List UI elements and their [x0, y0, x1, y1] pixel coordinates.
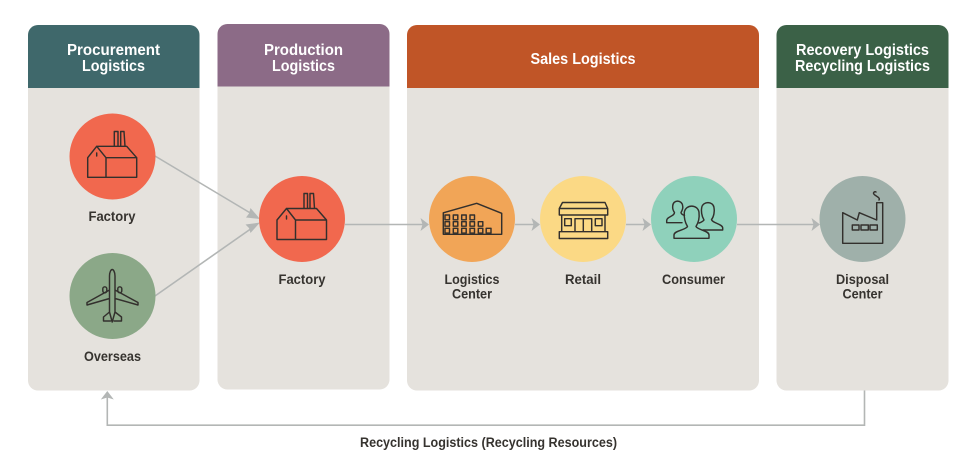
label: logistics center: Center: [452, 286, 493, 302]
heading: production logistics: Logistics: [272, 58, 335, 75]
heading: recovery and recycling logistics: Recycling Logistics: [795, 58, 930, 75]
icon: production factory: [259, 176, 345, 262]
label: logistics center: Logistics: [444, 272, 500, 287]
icon: retail store: [540, 176, 626, 262]
label: disposal center: Disposal: [836, 272, 889, 287]
arrow: overseas to production factory: [155, 222, 260, 296]
label: retail: Retail: [565, 272, 601, 287]
heading: production logistics: Production: [264, 42, 343, 59]
arrow: factory to logistics center: [345, 218, 429, 231]
arrow: consumer to disposal center: [737, 218, 820, 231]
label: recycling logistics loop: Recycling Logistics (Recycling Resources): [360, 435, 617, 450]
panel: procurement logistics: [28, 25, 200, 390]
label: consumer: Consumer: [662, 272, 726, 287]
arrow: logistics center to retail: [515, 218, 540, 231]
icon: procurement factory: [70, 114, 156, 200]
label: disposal center: Center: [842, 286, 883, 302]
heading: procurement logistics: Procurement: [67, 42, 160, 59]
heading: recovery and recycling logistics: Recovery Logistics: [796, 42, 929, 59]
label: overseas: Overseas: [84, 349, 141, 364]
heading: procurement logistics: Logistics: [82, 58, 145, 75]
label: procurement factory: Factory: [88, 209, 136, 224]
panel: recovery and recycling logistics: [776, 25, 948, 390]
arrow: procurement factory to production factory: [155, 156, 260, 219]
arrow: recycling loop back to procurement: [101, 390, 865, 425]
icon: logistics center warehouse: [429, 176, 515, 262]
heading: sales logistics: Sales Logistics: [530, 51, 636, 68]
icon: consumer people: [651, 176, 737, 262]
label: production factory: Factory: [278, 272, 326, 287]
arrow: retail to consumer: [626, 218, 651, 231]
panel: sales logistics: [407, 25, 759, 390]
panel: production logistics: [218, 24, 390, 390]
icon: overseas airplane: [70, 253, 156, 339]
icon: disposal center plant: [820, 176, 906, 262]
